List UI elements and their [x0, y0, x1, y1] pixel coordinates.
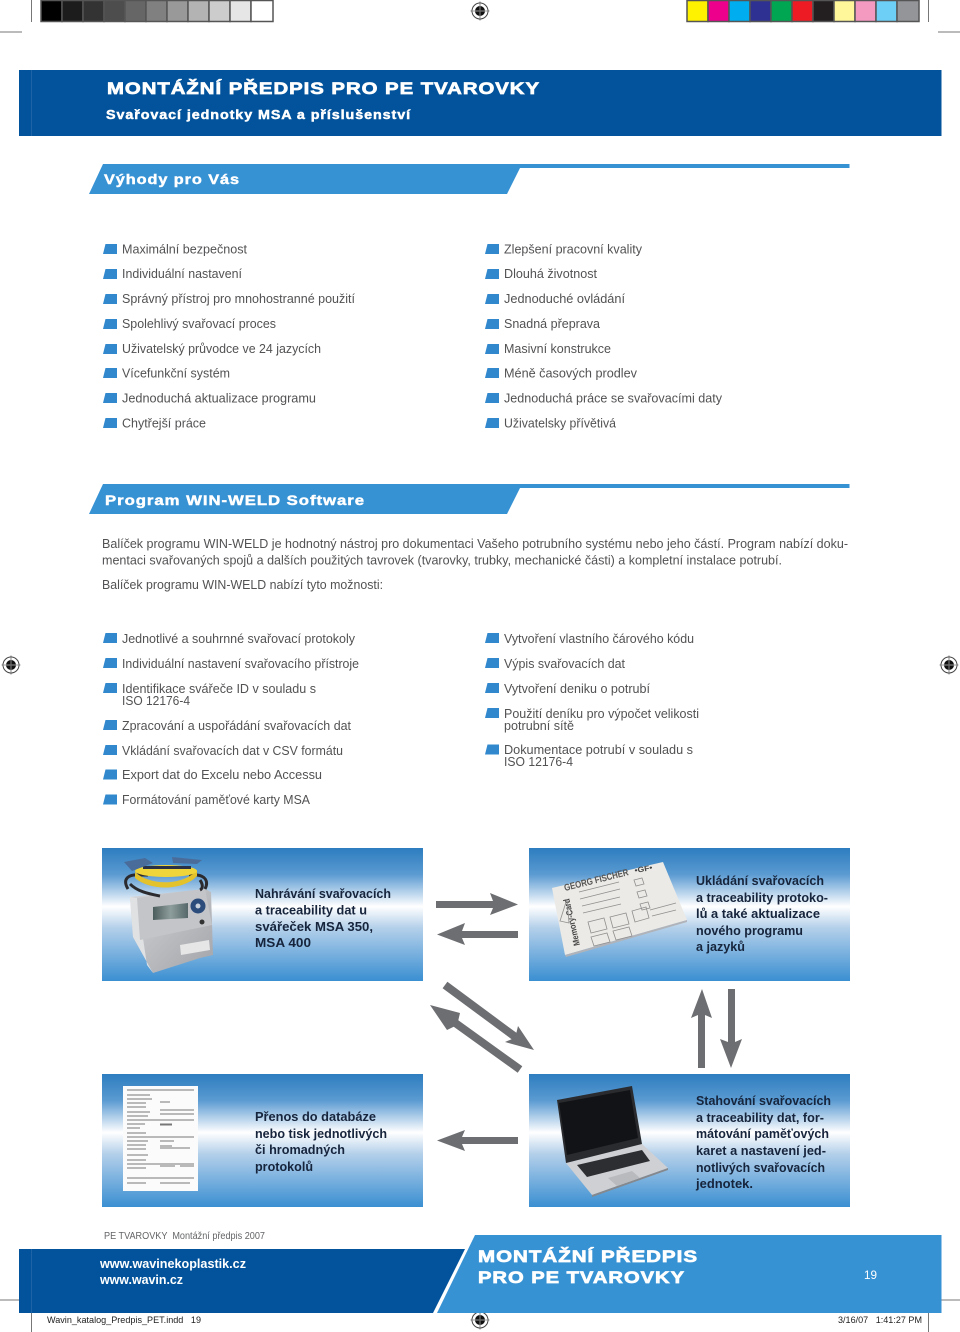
footer title — [478, 1247, 698, 1287]
process colour bar — [687, 0, 919, 22]
list: software options right: Vytvoření deniku o potrubí — [504, 681, 650, 696]
list: software options left: Jednotlivé a souhrnné svařovací protokoly — [122, 631, 355, 646]
list: software options left: Formátování paměťové karty MSA — [122, 792, 310, 807]
intro paragraph: Balíček programu WIN-WELD je hodnotný nástroj pro dokumentaci Vašeho potrubního systému nebo jeho částí. Program nabízí doku- — [102, 536, 848, 551]
footer links: www.wavinekoplastik.cz — [99, 1256, 246, 1271]
panel text — [695, 1093, 831, 1191]
list: benefits left — [103, 242, 355, 430]
list: software options left: Vkládání svařovacích dat v CSV formátu — [122, 743, 343, 758]
panel: memory card storage — [529, 848, 850, 981]
icon: welding machine — [124, 857, 213, 973]
list: software options left: Export dat do Excelu nebo Accessu — [122, 767, 322, 782]
panel text: a traceability dat u — [255, 902, 367, 918]
panel text — [696, 873, 828, 954]
footer links — [99, 1256, 246, 1287]
panel text: či hromadných — [255, 1142, 345, 1157]
panel text: MSA 400 — [255, 935, 311, 950]
panel text: mátování paměťových — [696, 1126, 829, 1141]
list: software options left: Zpracování a uspořádání svařovacích dat — [122, 718, 351, 733]
panel text: Nahrávání svařovacích — [255, 886, 391, 901]
section heading: Program WIN-WELD Software — [89, 484, 850, 514]
list: software options left: ISO 12176-4 — [122, 693, 190, 708]
list: software options right: Použití deníku pro výpočet velikosti — [504, 706, 699, 721]
list: benefits right: Uživatelsky přívětivá — [504, 416, 617, 430]
list: software options right: Dokumentace potrubí v souladu s — [504, 742, 693, 757]
section heading: Výhody pro Vás: Výhody pro Vás — [104, 171, 240, 187]
list: benefits left: Jednoduchá aktualizace programu — [122, 390, 316, 406]
print slug: file name: Wavin_katalog_Predpis_PET.indd 19 — [47, 1315, 201, 1326]
arrow: diagonal up left — [430, 1005, 522, 1073]
footer links: www.wavin.cz — [99, 1272, 183, 1287]
list: software options right — [485, 631, 699, 769]
list: software options right: ISO 12176-4 — [504, 754, 573, 769]
panel text: svářeček MSA 350, — [255, 919, 373, 934]
list: software options left: Individuální nastavení svařovacího přístroje — [122, 656, 359, 671]
panel text: notlivých svařovacích — [696, 1160, 825, 1175]
page number: 19 — [864, 1270, 877, 1282]
list: benefits right: Zlepšení pracovní kvality — [504, 242, 642, 256]
arrow: bottom left — [437, 1130, 518, 1151]
list: benefits left: Uživatelský průvodce ve 24 jazycích — [122, 341, 321, 356]
title: MONTÁŽNÍ PŘEDPIS PRO PE TVAROVKY — [107, 79, 540, 98]
list: software options left: Identifikace svářeče ID v souladu s — [122, 681, 316, 696]
panel text: Ukládání svařovacích — [696, 873, 824, 888]
icon: memory card: GEORG FISCHER — [563, 867, 630, 894]
panel text: Přenos do databáze — [255, 1109, 376, 1124]
list: benefits right: Jednoduché ovládání — [504, 291, 625, 306]
icon: memory card: •GF• — [634, 863, 653, 875]
section heading: Výhody pro Vás — [89, 164, 850, 194]
list: benefits right — [485, 242, 722, 430]
list: benefits right: Jednoduchá práce se svařovacími daty — [504, 390, 722, 406]
panel text: a traceability protoko- — [696, 890, 828, 905]
intro paragraph — [102, 536, 848, 592]
list: benefits left: Individuální nastavení — [122, 266, 242, 281]
list: benefits left: Maximální bezpečnost — [122, 242, 247, 256]
arrow: vertical up — [691, 989, 712, 1068]
panel text: Stahování svařovacích — [696, 1093, 831, 1108]
panel text: lů a také aktualizace — [696, 906, 820, 921]
list: benefits left: Chytřejší práce — [122, 416, 206, 430]
list: benefits right: Masivní konstrukce — [504, 341, 611, 356]
subtitle: Svařovací jednotky MSA a příslušenství — [106, 108, 411, 122]
list: software options right: Vytvoření vlastního čárového kódu — [504, 631, 694, 646]
print slug: date: 3/16/07 1:41:27 PM — [838, 1315, 922, 1326]
intro paragraph: mentaci svařovaných spojů a dalších použitých tavrovek (tvarovky, trubky, mechanické části) a kompletní instalace potrubí. — [102, 552, 782, 568]
panel text — [255, 886, 391, 950]
panel: database and printing — [102, 1074, 423, 1207]
greyscale colour bar — [41, 0, 273, 22]
panel text: protokolů — [255, 1159, 313, 1174]
section heading: Program WIN-WELD Software: Program WIN-WELD Software — [105, 492, 365, 508]
panel: welding unit upload — [102, 848, 423, 981]
panel text: nového programu — [696, 923, 803, 938]
panel text — [255, 1109, 387, 1174]
panel text: a traceability dat, for- — [696, 1110, 824, 1125]
icon: laptop — [557, 1086, 668, 1197]
footer title: MONTÁŽNÍ PŘEDPIS — [478, 1247, 698, 1266]
arrow: top right — [436, 893, 518, 915]
panel: laptop download — [529, 1074, 850, 1207]
panel text: karet a nastavení jed- — [696, 1143, 826, 1158]
list: benefits left: Vícefunkční systém — [122, 366, 230, 380]
icon: protocol document — [123, 1086, 198, 1191]
panel text: a jazyků — [696, 939, 745, 954]
footer band — [19, 1235, 942, 1313]
footer title: PRO PE TVAROVKY — [478, 1269, 685, 1287]
list: software options left — [103, 631, 359, 807]
arrow: top left — [437, 923, 518, 945]
list: benefits right: Méně časových prodlev — [504, 366, 637, 380]
intro paragraph: Balíček programu WIN-WELD nabízí tyto možnosti: — [102, 577, 383, 592]
arrow: vertical down — [720, 989, 742, 1068]
list: benefits left: Spolehlivý svařovací proces — [122, 316, 276, 331]
icon: memory card: Memory-Card — [561, 898, 582, 947]
arrow: diagonal down right — [443, 982, 534, 1050]
list: benefits left: Správný přístroj pro mnohostranné použití — [122, 291, 355, 306]
list: benefits right: Snadná přeprava — [504, 316, 601, 331]
panel text: nebo tisk jednotlivých — [255, 1126, 387, 1141]
footer caption: PE TVAROVKY Montážní předpis 2007 — [104, 1231, 265, 1242]
list: software options right: potrubní sítě — [504, 718, 574, 733]
header banner — [19, 70, 942, 136]
icon: memory card — [552, 862, 687, 957]
panel text: jednotek. — [695, 1176, 753, 1191]
list: benefits right: Dlouhá životnost — [504, 266, 597, 281]
list: software options right: Výpis svařovacích dat — [504, 656, 625, 671]
